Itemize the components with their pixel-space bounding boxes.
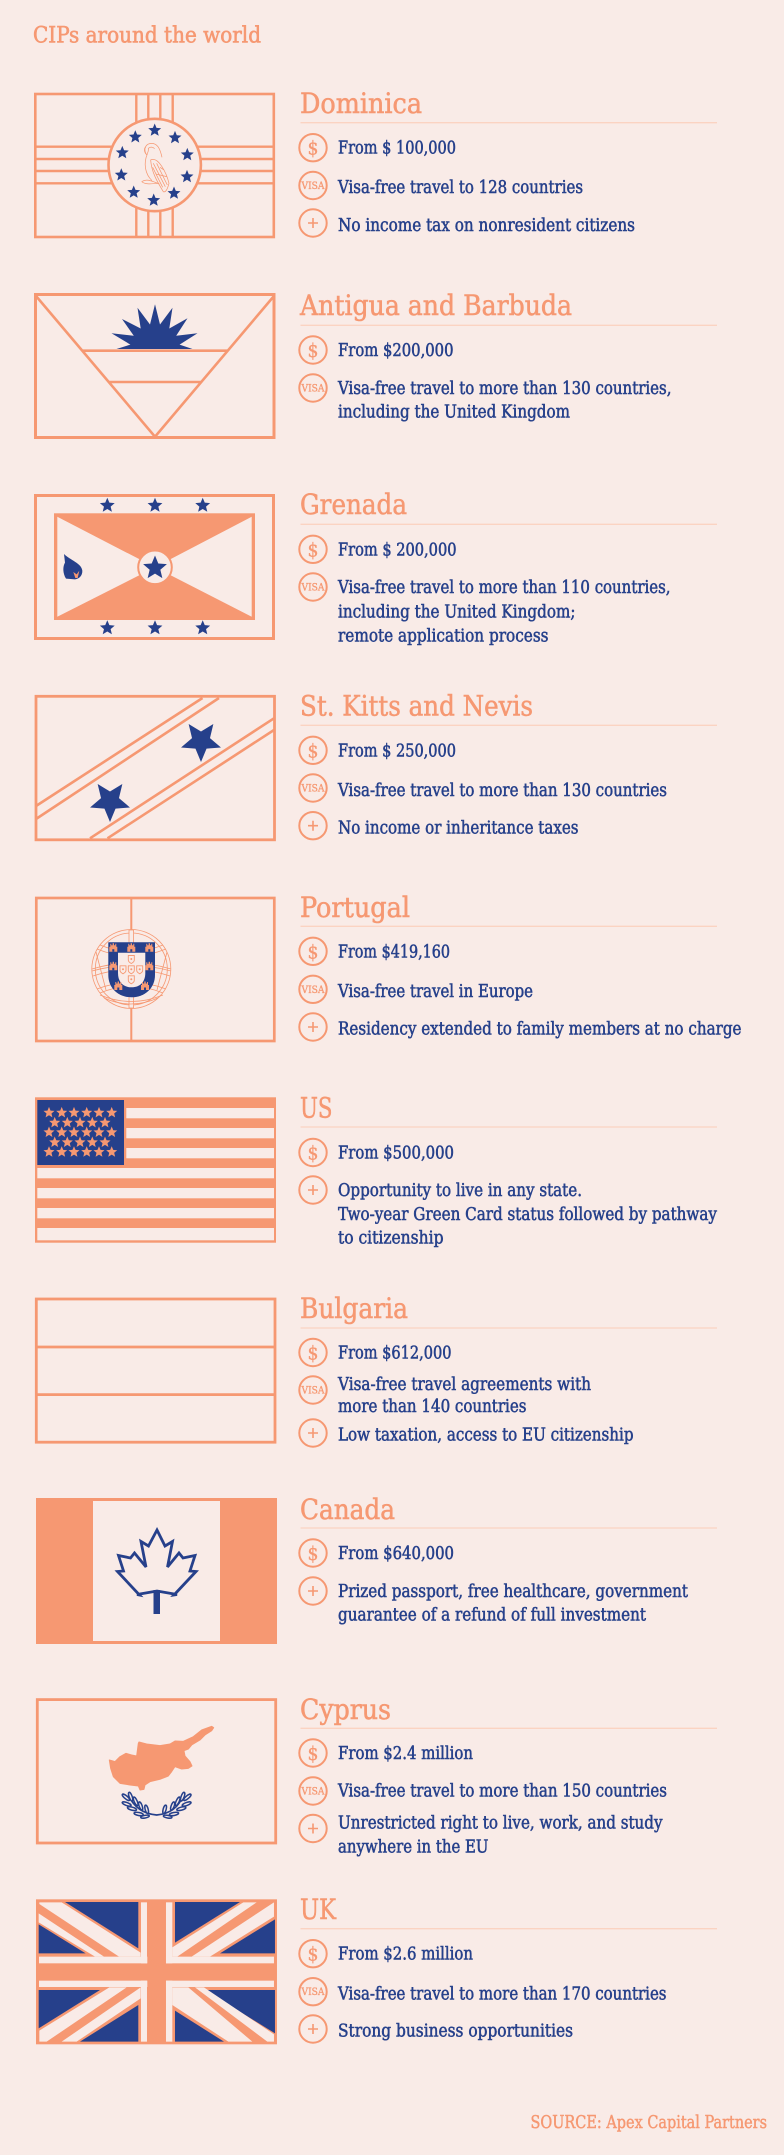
text: benefit: Prized passport, free healthcare, government <box>338 1582 689 1602</box>
icon: plus <box>299 812 327 839</box>
flag: Canada <box>36 1498 277 1644</box>
icon: maple leaf <box>118 1530 196 1595</box>
icon: price <box>299 1940 327 1967</box>
icon: olive branches <box>121 1792 192 1819</box>
text: visa: Visa-free travel to 128 countries <box>337 178 583 198</box>
text: benefit: Strong business opportunities <box>338 2022 573 2042</box>
flag: UK <box>36 1899 277 2044</box>
text: visa line 2: including the United Kingdom; <box>338 602 576 622</box>
icon: parrot <box>142 143 169 192</box>
icon: nutmeg <box>63 554 82 579</box>
icon: price <box>299 536 327 563</box>
icon: price <box>299 134 327 161</box>
heading: US <box>300 1092 332 1124</box>
panel: Antigua and Barbuda <box>36 289 717 438</box>
icon: price <box>299 1339 327 1366</box>
heading: Antigua and Barbuda <box>299 289 572 322</box>
icon: visa <box>299 1376 327 1404</box>
icon: plus <box>299 1577 327 1605</box>
icon: plus <box>299 209 327 237</box>
text: price: From $500,000 <box>338 1143 454 1163</box>
heading: Grenada <box>300 488 407 521</box>
text: visa line 3: remote application process <box>338 626 548 646</box>
flag: Portugal <box>36 898 274 1041</box>
text: visa: Visa-free travel to more than 170 countries <box>337 1984 666 2004</box>
panel: Portugal <box>36 891 742 1041</box>
panel: Cyprus <box>37 1693 717 1858</box>
text: visa: Visa-free travel to more than 130 countries, <box>337 379 672 399</box>
heading: Cyprus <box>300 1693 391 1726</box>
panel: Dominica <box>35 87 717 237</box>
text: price: From $ 100,000 <box>338 138 456 158</box>
icon: plus <box>299 1176 327 1204</box>
icon: visa <box>299 1978 327 2005</box>
text: visa: Visa-free travel to more than 130 countries <box>337 781 667 801</box>
text: benefit line 2: guarantee of a refund of full investment <box>338 1606 647 1626</box>
text: benefit: Unrestricted right to live, work, and study <box>338 1814 663 1834</box>
icon: visa <box>299 976 327 1003</box>
text: price: From $2.4 million <box>338 1744 473 1764</box>
text: price: From $612,000 <box>338 1343 452 1363</box>
text: benefit: Opportunity to live in any state. <box>338 1181 582 1201</box>
icon: plus <box>299 1419 327 1447</box>
text: visa: Visa-free travel in Europe <box>337 982 533 1002</box>
text: benefit: Residency extended to family members at no charge <box>338 1020 742 1040</box>
icon: visa <box>299 573 327 601</box>
text: visa line 2: including the United Kingdom <box>338 403 570 423</box>
text: visa: Visa-free travel to more than 110 countries, <box>337 578 670 598</box>
heading: Dominica <box>300 87 422 120</box>
panel: UK <box>36 1893 717 2044</box>
icon: price <box>299 737 327 764</box>
text: visa line 2: more than 140 countries <box>338 1397 526 1417</box>
flag: Grenada <box>36 496 274 638</box>
text: visa: Visa-free travel to more than 150 countries <box>337 1782 667 1802</box>
heading: Portugal <box>300 891 410 924</box>
icon: armillary sphere <box>92 930 171 1008</box>
flag: Dominica <box>35 94 274 237</box>
heading: UK <box>300 1893 337 1926</box>
panel: St. Kitts and Nevis <box>36 690 717 840</box>
text: benefit: Low taxation, access to EU citizenship <box>338 1426 634 1446</box>
flag: Cyprus <box>37 1700 276 1843</box>
flag: St. Kitts and Nevis <box>36 696 274 840</box>
icon: price <box>299 1139 327 1166</box>
text: benefit line 2: anywhere in the EU <box>338 1838 488 1858</box>
icon: plus <box>299 1815 327 1842</box>
icon: island <box>109 1726 214 1790</box>
flag: US <box>35 1097 276 1243</box>
text: price: From $419,160 <box>338 942 450 962</box>
icon: plus <box>299 1013 327 1041</box>
icon: sun <box>112 304 198 349</box>
text: benefit line 2: Two-year Green Card status followed by pathway <box>338 1205 717 1225</box>
heading: Bulgaria <box>300 1292 408 1325</box>
flag: Bulgaria <box>36 1299 275 1442</box>
text: benefit: No income or inheritance taxes <box>338 818 578 838</box>
icon: price <box>299 1539 327 1567</box>
text: price: From $640,000 <box>338 1544 454 1564</box>
text: price: From $ 250,000 <box>338 741 456 761</box>
icon: price <box>299 1739 327 1767</box>
text: visa: Visa-free travel agreements with <box>337 1375 591 1395</box>
icon: visa <box>299 1777 327 1805</box>
text: benefit line 3: to citizenship <box>338 1229 444 1249</box>
panel: Canada <box>36 1493 717 1644</box>
panel: US <box>35 1092 717 1249</box>
heading: Canada <box>300 1493 395 1526</box>
title: CIPs around the world <box>33 24 261 49</box>
panel: Grenada <box>36 488 717 646</box>
text: benefit: No income tax on nonresident citizens <box>338 216 635 236</box>
flag: Antigua and Barbuda <box>36 294 274 438</box>
panel: Bulgaria <box>36 1292 717 1447</box>
text: price: From $ 200,000 <box>338 540 456 560</box>
icon: visa <box>299 774 327 802</box>
heading: St. Kitts and Nevis <box>300 690 533 723</box>
icon: price <box>299 938 327 965</box>
icon: price <box>299 336 327 364</box>
text: price: From $2.6 million <box>338 1945 473 1965</box>
icon: visa <box>299 374 327 402</box>
icon: visa <box>299 172 327 199</box>
icon: shield <box>108 942 155 997</box>
text: price: From $200,000 <box>338 341 454 361</box>
icon: plus <box>299 2015 327 2043</box>
